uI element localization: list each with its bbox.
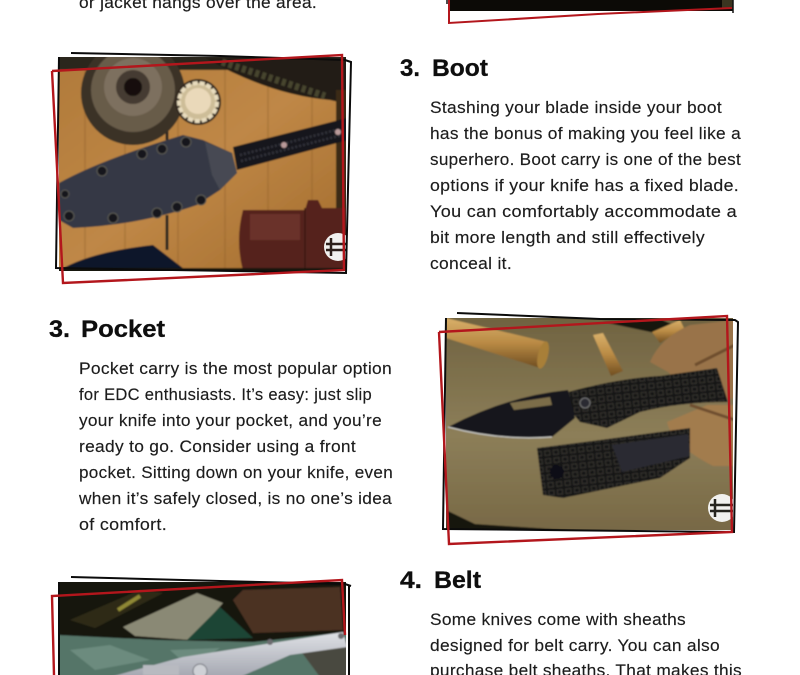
text block: Pocket: pocket. Sitting down on your knife, even bbox=[79, 463, 393, 482]
hand drawn black frame bbox=[443, 313, 738, 532]
text block: Belt: Some knives come with sheaths bbox=[430, 610, 686, 629]
hand drawn black frame bbox=[59, 577, 351, 675]
open knife handle bbox=[568, 368, 728, 428]
logo badge bbox=[708, 494, 733, 522]
heading: Pocket: 3. bbox=[49, 316, 70, 343]
text block: Boot: Stashing your blade inside your boot bbox=[430, 98, 722, 117]
text block: Boot: superhero. Boot carry is one of the best bbox=[430, 150, 741, 169]
photo: silver folding knife on patina surface bbox=[52, 577, 351, 675]
logo badge bbox=[324, 233, 346, 261]
heading: Pocket: Pocket bbox=[81, 316, 165, 343]
rust leather bbox=[233, 587, 343, 633]
text block: Pocket: Pocket carry is the most popular option bbox=[79, 359, 392, 378]
hand drawn red frame bbox=[52, 55, 344, 283]
olive pattern bbox=[70, 590, 163, 628]
text block: Boot: has the bonus of making you feel like a bbox=[430, 124, 741, 143]
heading: Boot bbox=[400, 55, 488, 82]
book bbox=[123, 593, 223, 640]
open knife blade bbox=[448, 390, 575, 438]
text block: Pocket: for EDC enthusiasts. It’s easy: just slip bbox=[79, 385, 372, 404]
text block: Belt bbox=[430, 610, 742, 675]
heading: Belt: 4. bbox=[400, 567, 422, 594]
closed knife bbox=[537, 428, 690, 498]
text block: Boot: bit more length and still effectively bbox=[430, 228, 705, 247]
heading: Belt: Belt bbox=[434, 567, 481, 594]
text block: Pocket: ready to go. Consider using a front bbox=[79, 437, 356, 456]
photo: fixed blade knife in kydex sheath on wood bbox=[52, 41, 352, 283]
coin bbox=[80, 57, 185, 146]
hand drawn red frame bbox=[439, 316, 732, 544]
text block: Boot: options if your knife has a fixed blade. bbox=[430, 176, 739, 195]
heading: Boot: Boot bbox=[432, 55, 488, 82]
knife bbox=[110, 632, 347, 675]
dark band top and cloth top right bbox=[57, 55, 348, 70]
dark fold at bottom bbox=[446, 510, 563, 530]
patina surface bbox=[57, 632, 348, 675]
leather gloves bbox=[650, 320, 735, 402]
sheath bbox=[59, 135, 237, 228]
heading: Pocket bbox=[49, 316, 165, 343]
text block: Pocket: of comfort. bbox=[79, 515, 167, 534]
text block: Boot: You can comfortably accommodate a bbox=[430, 202, 737, 221]
heading: Boot: 3. bbox=[400, 55, 420, 82]
ivory medallion bbox=[175, 79, 221, 125]
brass cartridges bbox=[446, 318, 547, 368]
hand drawn red frame bbox=[52, 580, 345, 675]
hand drawn black frame bbox=[56, 53, 351, 273]
photo: cropped knife image top right bbox=[447, 0, 733, 23]
text block: Pocket: when it’s safely closed, is no one’s idea bbox=[78, 489, 392, 508]
text block: Pocket: your knife into your pocket, and you’re bbox=[79, 411, 382, 430]
heading: Belt bbox=[400, 567, 481, 594]
text block: Belt: designed for belt carry. You can also bbox=[430, 636, 720, 655]
text block: Boot: conceal it. bbox=[430, 254, 512, 273]
handle bbox=[233, 118, 348, 170]
text block: Pocket bbox=[78, 359, 393, 534]
text block: Boot bbox=[430, 98, 741, 273]
leather pouch bbox=[239, 200, 348, 271]
black cloth bbox=[64, 244, 183, 270]
photo: black folding knives on canvas bbox=[439, 313, 738, 544]
